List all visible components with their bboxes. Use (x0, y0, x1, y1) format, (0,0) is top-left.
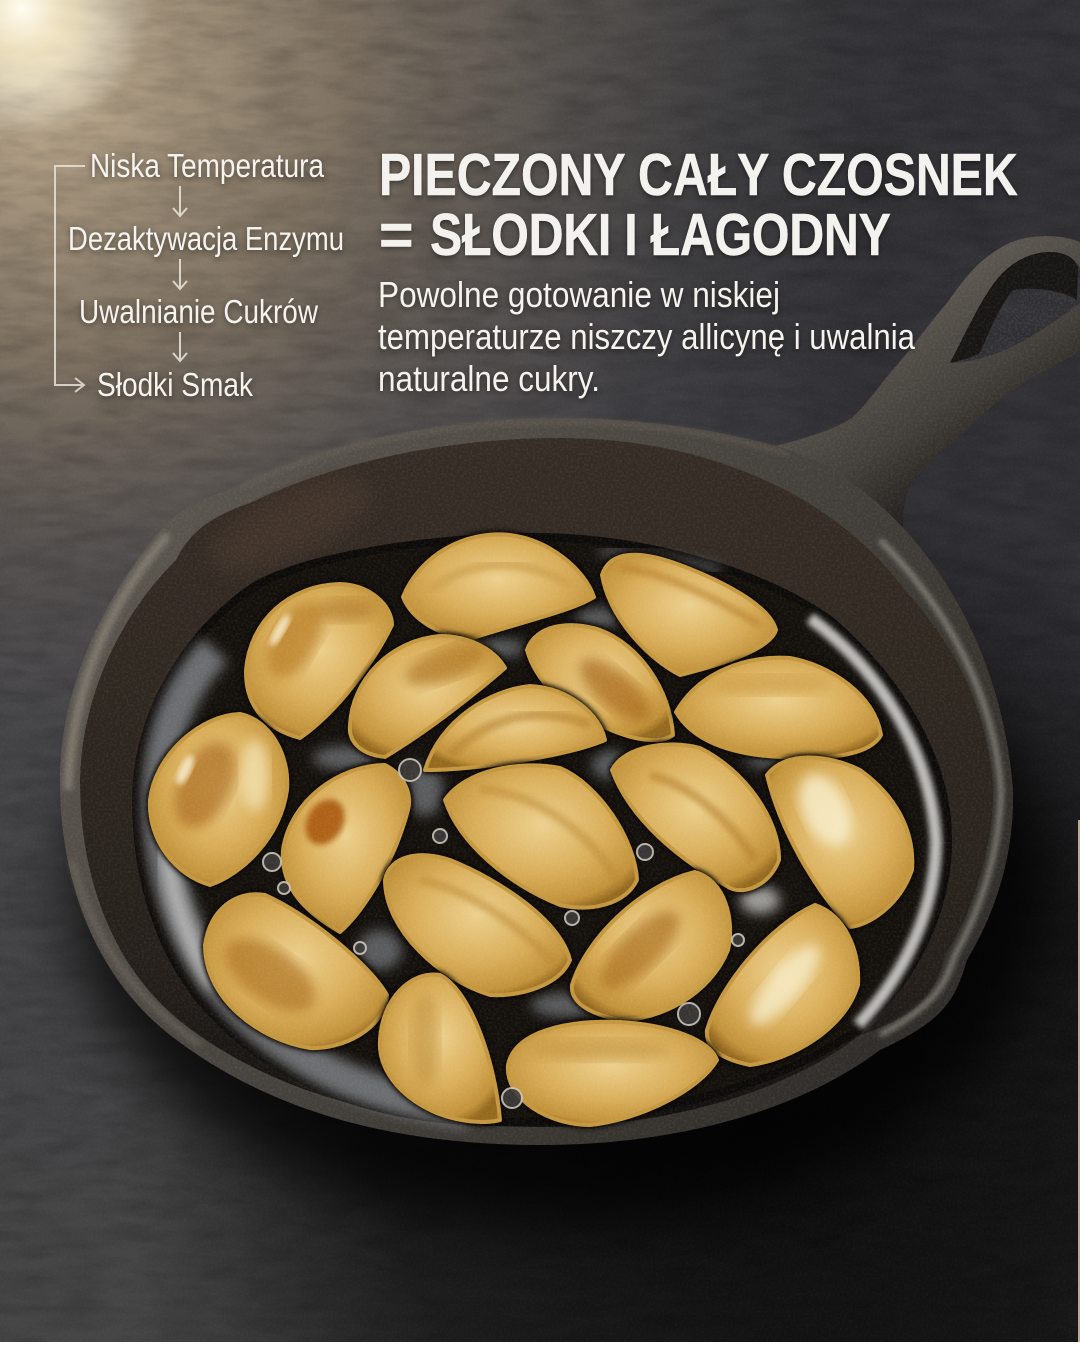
description text: naturalne cukry. (378, 358, 600, 399)
clove 12 (767, 758, 912, 927)
clove 17 (380, 974, 500, 1122)
oil between the cloves (313, 608, 794, 1017)
title (379, 143, 1018, 268)
description text: Powolne gotowanie w niskiej (378, 274, 780, 315)
title: SŁODKI I ŁAGODNY (430, 203, 891, 268)
clove 16 (205, 894, 387, 1048)
clove 4 (350, 636, 505, 757)
description text: temperaturze niszczy allicynę i uwalnia (378, 316, 916, 357)
step: Uwalnianie Cukrów: Uwalnianie Cukrów (79, 293, 318, 330)
clove 6 (676, 658, 881, 758)
cast iron grain (50, 230, 1080, 1155)
clove 15 (707, 905, 858, 1065)
arrow 2 (173, 259, 187, 289)
lit patch on inner wall (195, 458, 385, 592)
rim highlights (68, 422, 1001, 1045)
pan outer rim (60, 418, 1013, 1145)
pan oil (136, 537, 948, 1122)
arrow 1 (173, 186, 187, 216)
flow diagram (55, 147, 344, 403)
clove 3 (246, 584, 392, 738)
clove 8 (150, 714, 287, 885)
clove 13 (385, 855, 570, 995)
pan handle (740, 236, 1080, 600)
clove 9 (283, 765, 409, 932)
clove 18 (508, 1022, 717, 1125)
clove 14 (572, 872, 730, 1020)
frying pan (50, 230, 1080, 1225)
step: Dezaktywacja Enzymu: Dezaktywacja Enzymu (68, 220, 344, 257)
clove 10 (445, 765, 637, 908)
clove 5 (527, 625, 673, 740)
clove 7 (425, 686, 605, 770)
step: Słodki Smak: Słodki Smak (97, 366, 253, 403)
pan inner wall (80, 438, 993, 1127)
oil reflections (159, 550, 936, 1112)
arrow 3 (173, 332, 187, 361)
clove 1 (403, 534, 594, 639)
clove 2 (602, 555, 776, 675)
pan shadow (70, 555, 1050, 1225)
clove 11 (612, 744, 779, 890)
title: = (379, 202, 413, 268)
title: PIECZONY CAŁY CZOSNEK (379, 143, 1018, 208)
bracket arrow from first step to last step (55, 166, 85, 392)
oil bubbles (263, 759, 744, 1108)
garlic cloves (150, 534, 912, 1125)
description text (378, 274, 916, 399)
handle hole inner wall (950, 252, 1078, 363)
step: Niska Temperatura: Niska Temperatura (90, 147, 325, 184)
